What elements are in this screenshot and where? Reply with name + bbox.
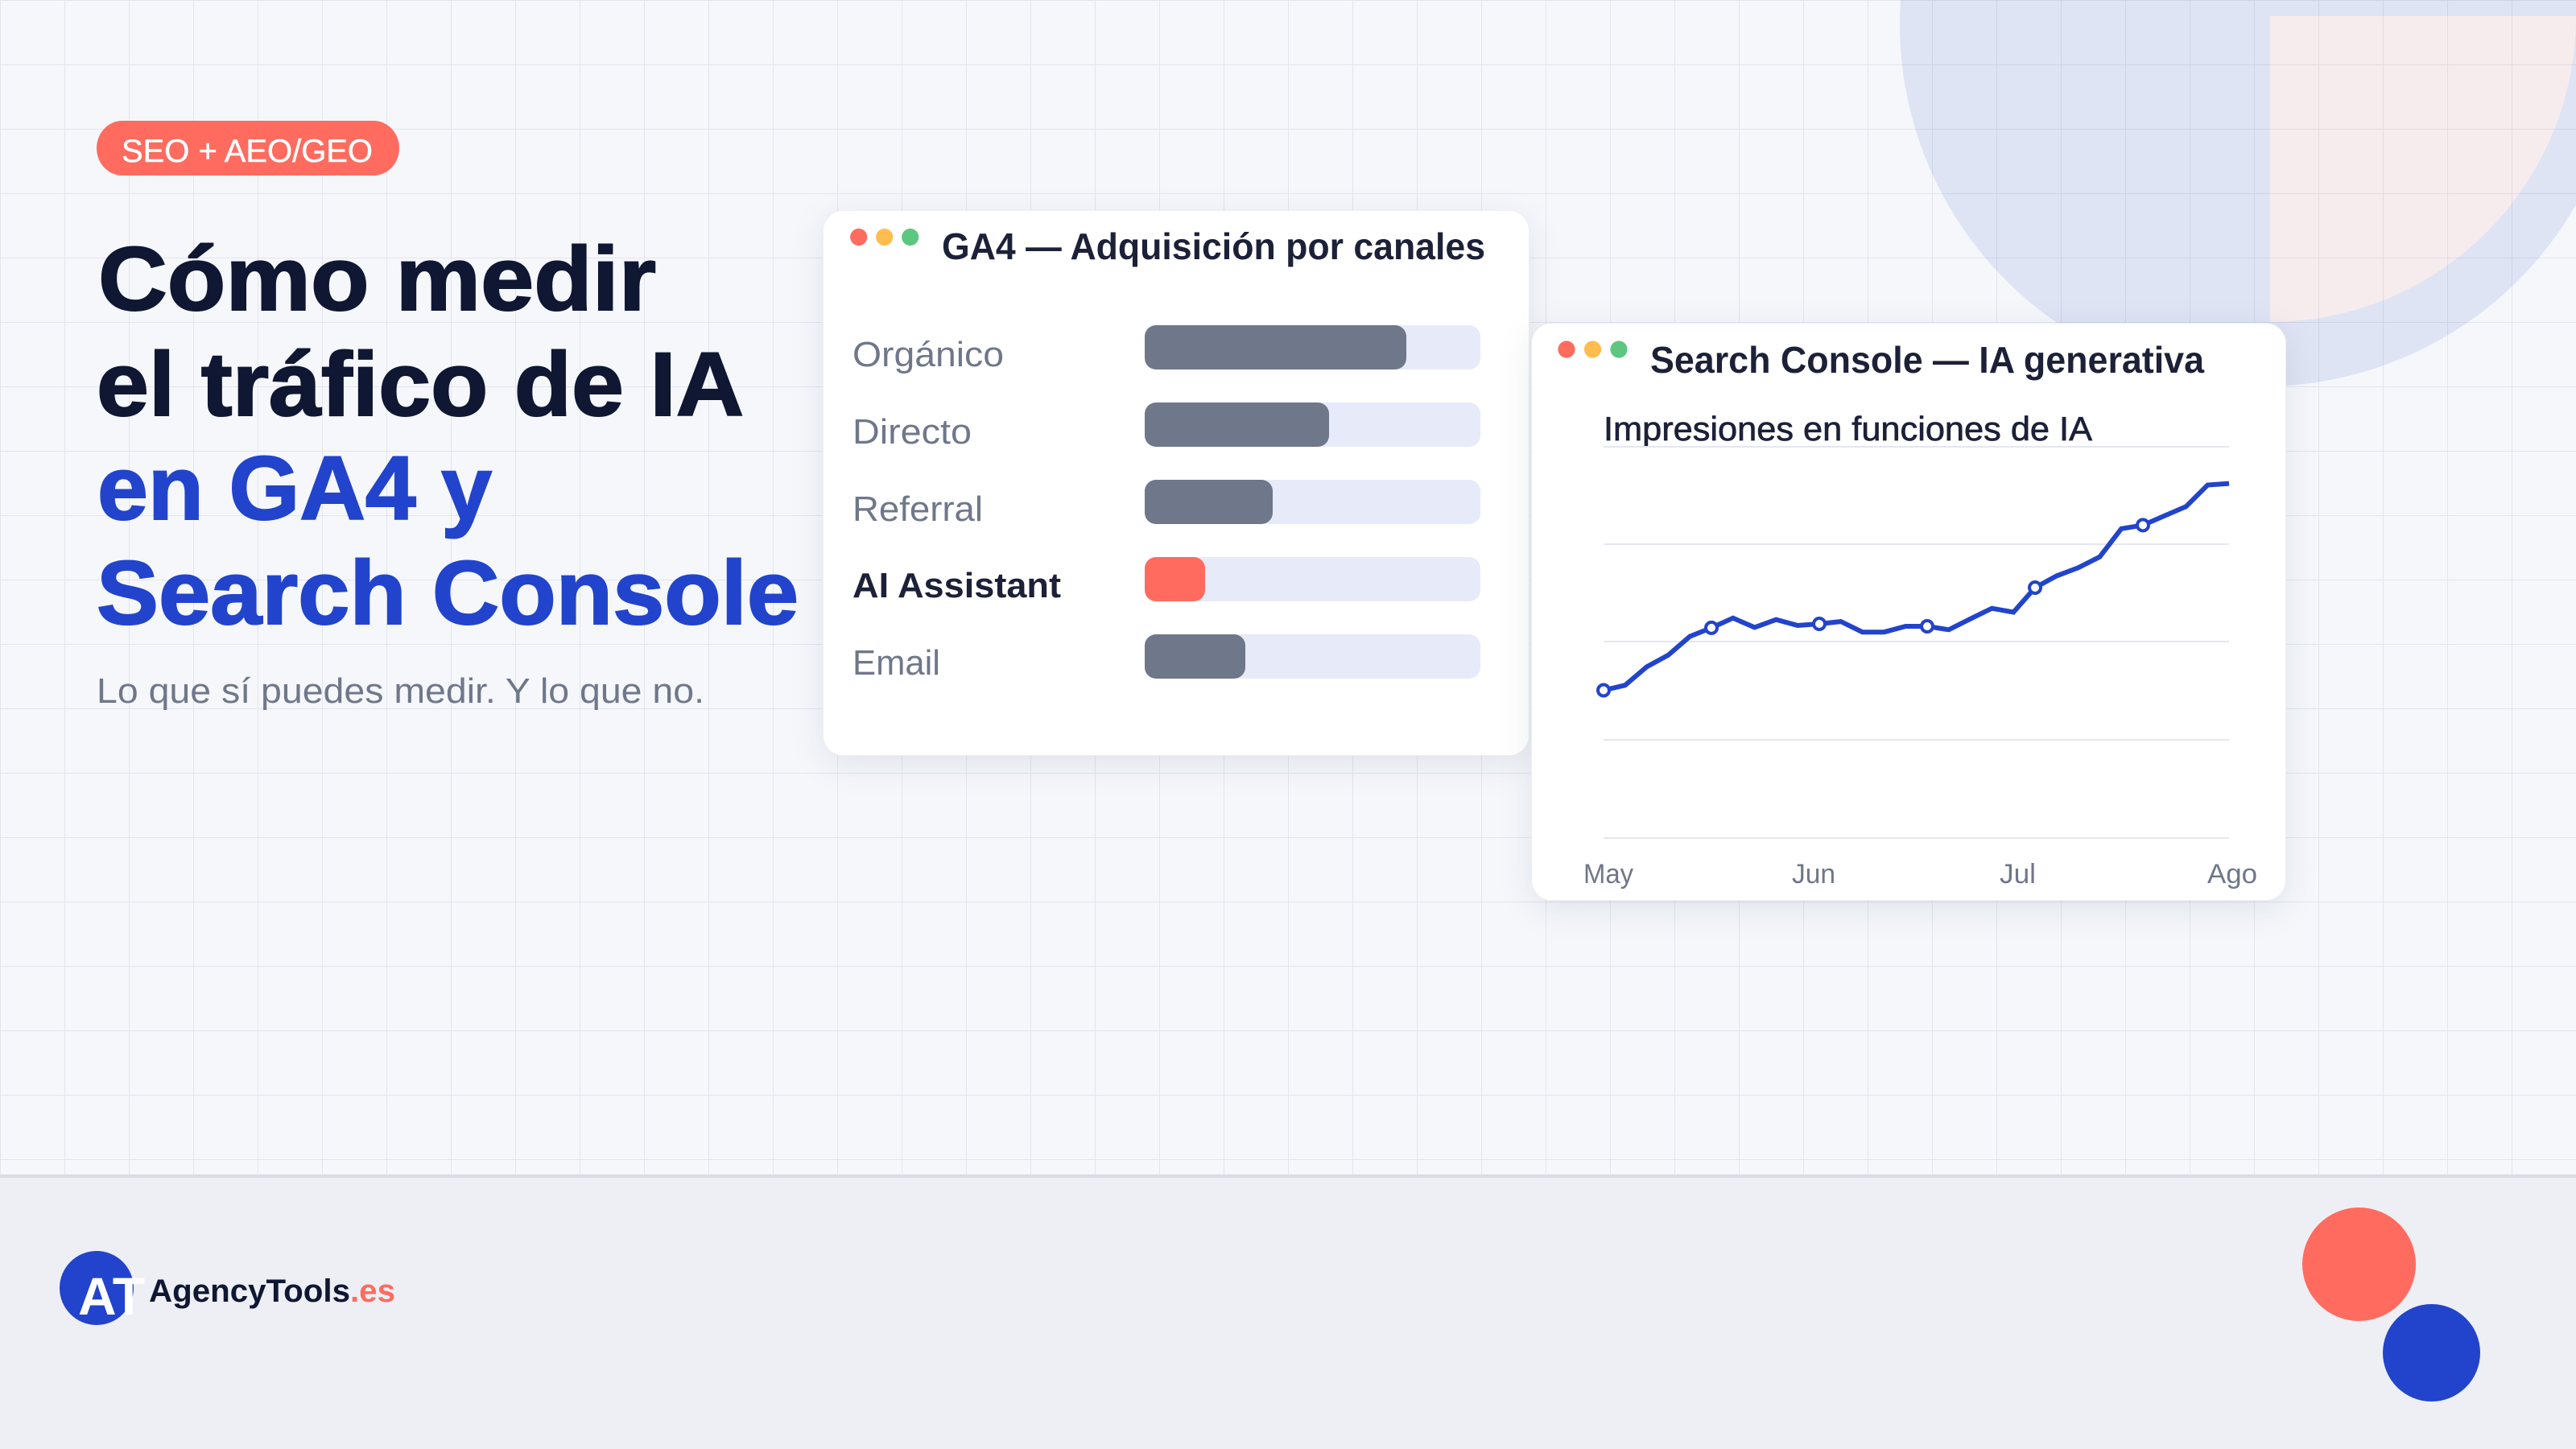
row: Orgánico: Orgánico	[852, 335, 1004, 374]
logo mark: AT	[78, 1266, 145, 1326]
x axis labels	[1583, 859, 2257, 890]
title	[97, 229, 799, 643]
title: el tráfico de IA	[97, 334, 744, 435]
x axis labels: Jun	[1792, 859, 1835, 890]
window dots	[850, 229, 919, 246]
row: Referral: Referral	[852, 489, 983, 529]
logo mark	[60, 1251, 145, 1326]
x axis labels: May	[1583, 859, 1633, 890]
decorative blue circle	[1900, 0, 2576, 386]
badge: SEO + AEO/GEO: SEO + AEO/GEO	[122, 134, 373, 169]
decorative pink quarter circle	[2270, 16, 2576, 322]
panel: Search Console generative AI	[1531, 324, 2286, 900]
panel heading: GA4 — Adquisición por canales	[942, 225, 1485, 267]
title: en GA4 y	[97, 438, 492, 539]
row: Email: Email	[852, 643, 940, 683]
badge: SEO + AEO/GEO	[97, 121, 399, 175]
footer band	[0, 1174, 2576, 1449]
chart heading: Impresiones en funciones de IA	[1604, 410, 2092, 448]
row: AI Assistant: AI Assistant	[852, 566, 1061, 605]
row: Directo: Directo	[852, 412, 972, 452]
title: Cómo medir	[98, 229, 656, 329]
row: Orgánico	[852, 325, 1480, 374]
x axis labels: Jul	[2000, 859, 2036, 890]
logo: AgencyTools.es	[60, 1251, 395, 1326]
panel: GA4 channel acquisition	[823, 211, 1530, 755]
panel heading: Search Console — IA generativa	[1650, 339, 2204, 381]
logo wordmark: AgencyTools.es	[149, 1274, 395, 1309]
row: Email	[852, 634, 1480, 683]
x axis labels: Ago	[2207, 859, 2257, 890]
row: Directo	[852, 402, 1480, 452]
row: Referral	[852, 480, 1480, 529]
decorative coral circle	[2302, 1208, 2416, 1321]
subtitle: Lo que sí puedes medir. Y lo que no.	[97, 671, 704, 711]
row: AI Assistant	[852, 557, 1480, 605]
window dots	[1558, 341, 1628, 358]
decorative blue circle, footer	[2383, 1304, 2480, 1402]
title: Search Console	[97, 543, 799, 643]
line chart	[1598, 447, 2229, 838]
